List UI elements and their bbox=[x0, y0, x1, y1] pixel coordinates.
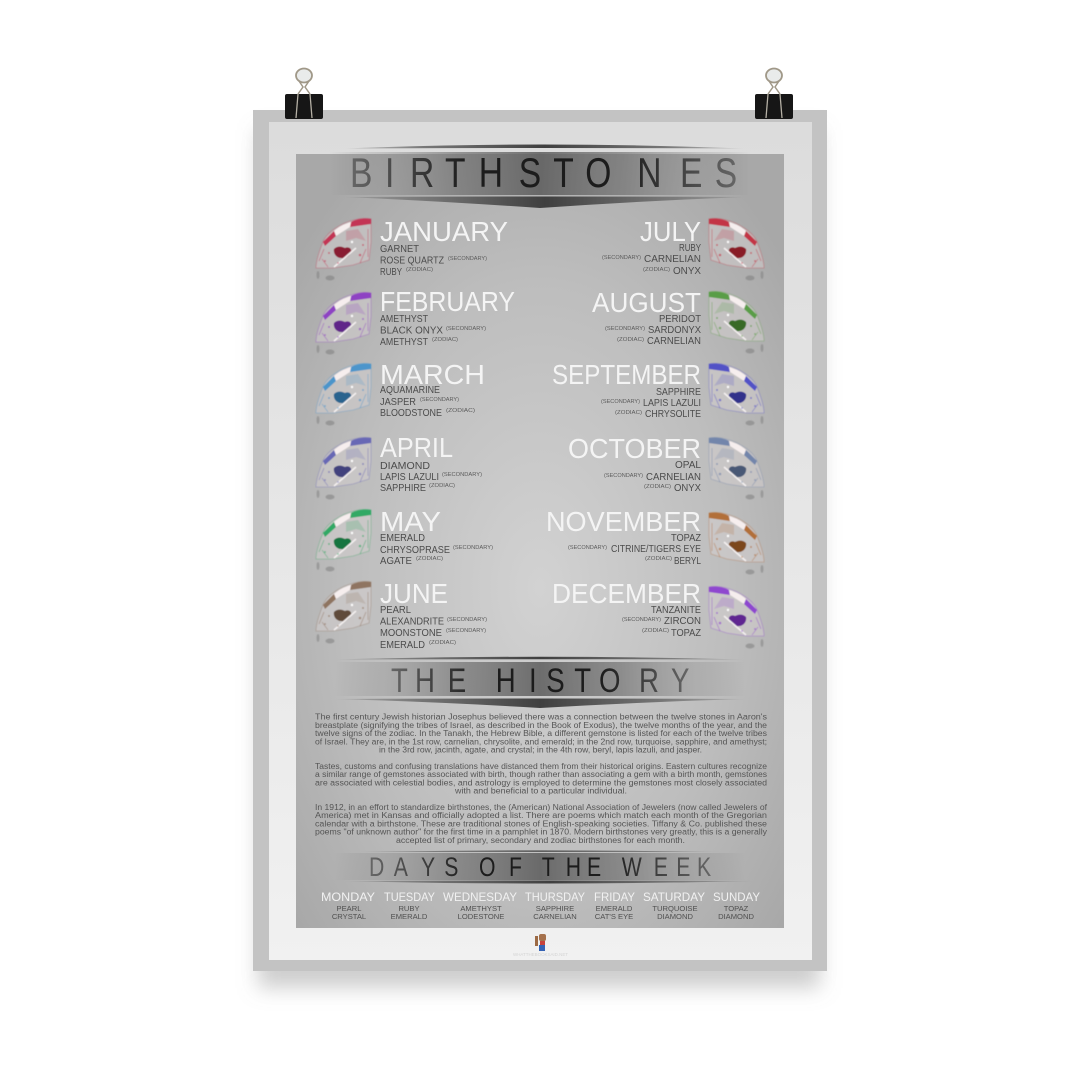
stones list: SARDONYX bbox=[648, 324, 701, 336]
stones list: (SECONDARY) bbox=[601, 399, 640, 405]
Tuesday: TUESDAY bbox=[384, 890, 435, 904]
title bbox=[330, 144, 750, 208]
stones list: (ZODIAC) bbox=[416, 556, 443, 562]
stones list: (SECONDARY) bbox=[446, 628, 486, 634]
stones list bbox=[601, 386, 701, 420]
stones list: CHRYSOPRASE bbox=[380, 544, 450, 556]
Friday: CAT'S EYE bbox=[595, 912, 633, 921]
Sunday bbox=[713, 890, 760, 921]
Monday: PEARL bbox=[337, 904, 361, 913]
icon: aquamarine gem bbox=[316, 363, 371, 426]
month heading: OCTOBER bbox=[568, 433, 701, 464]
stones list: (ZODIAC) bbox=[406, 267, 433, 273]
month heading: JANUARY bbox=[380, 216, 508, 247]
stones list: BLACK ONYX bbox=[380, 324, 443, 336]
month heading: FEBRUARY bbox=[380, 286, 515, 317]
stones list bbox=[622, 604, 702, 639]
paragraph 3: In 1912, in an effort to standardize birthstones, the (American) National Association of Jewelers (now called Jewelers of bbox=[315, 803, 768, 812]
history text bbox=[315, 712, 768, 845]
paragraph 2: are associated with celestial bodies, and astrology is employed to determine the gemstones most closely associated bbox=[315, 778, 767, 787]
stones list: CARNELIAN bbox=[646, 471, 701, 483]
November bbox=[546, 506, 764, 574]
stones list bbox=[380, 604, 487, 651]
stones list: (SECONDARY) bbox=[448, 256, 487, 262]
stones list: ONYX bbox=[674, 482, 701, 494]
icon: sapphire gem bbox=[709, 363, 764, 426]
August bbox=[592, 287, 764, 354]
stones list: PERIDOT bbox=[659, 313, 702, 325]
paragraph 1: of Israel. They are, in the 1st row, carnelian, chrysolite, and emerald; in the 2nd row, turquoise, sapphire, and amethyst; bbox=[315, 737, 767, 746]
days table bbox=[321, 890, 760, 921]
paragraph 3: America) met in Kansas and officially adopted a list. There are poems which match each month of the Gregorian bbox=[315, 811, 767, 820]
stones list: (ZODIAC) bbox=[643, 267, 670, 273]
stones list: (ZODIAC) bbox=[446, 408, 475, 414]
Thursday: SAPPHIRE bbox=[536, 904, 574, 913]
Monday bbox=[321, 890, 375, 921]
paragraph 3: poems "of unknown author" for the first time in a pamphlet in 1870. Modern birthstones very greatly, this is a generally bbox=[315, 828, 767, 837]
stones list: EMERALD bbox=[380, 532, 425, 544]
logo mascot: WHATTHEBOOKSAID.NET bbox=[513, 952, 568, 957]
paragraph 1 bbox=[315, 712, 768, 755]
stones list: (SECONDARY) bbox=[604, 473, 643, 479]
stones list: (SECONDARY) bbox=[453, 545, 493, 551]
stones list bbox=[380, 532, 493, 567]
month heading: JUNE bbox=[380, 578, 448, 609]
stones list: GARNET bbox=[380, 243, 420, 255]
paragraph 2: a similar range of gemstones associated with birth, though rather than associating a gem with a birth month, gemstones bbox=[315, 770, 767, 779]
paragraph 2: Tastes, customs and confusing translations have distanced them from their historical origins. Eastern cultures recognize bbox=[315, 762, 768, 771]
stones list: OPAL bbox=[675, 459, 701, 471]
icon: opal gem bbox=[709, 437, 764, 500]
paragraph 1: The first century Jewish historian Josephus believed there was a connection between the twelve stones in Aaron's bbox=[315, 712, 767, 722]
stones list: BERYL bbox=[674, 555, 701, 567]
logo mascot bbox=[513, 934, 568, 957]
stones list bbox=[605, 313, 702, 347]
Wednesday: LODESTONE bbox=[458, 912, 504, 921]
stones list: (SECONDARY) bbox=[420, 397, 459, 403]
paragraph 3: accepted list of primary, secondary and zodiac birthstones for each month. bbox=[396, 836, 685, 845]
stones list: AMETHYST bbox=[380, 313, 428, 325]
stones list bbox=[380, 384, 475, 419]
stones list: JASPER bbox=[380, 396, 416, 408]
March bbox=[316, 359, 485, 426]
paragraph 2 bbox=[315, 762, 768, 796]
paragraph 3 bbox=[315, 803, 768, 845]
stones list bbox=[604, 459, 701, 494]
October bbox=[568, 433, 764, 500]
stones list: TOPAZ bbox=[671, 627, 702, 639]
icon: diamond gem bbox=[316, 437, 371, 500]
stones list: ZIRCON bbox=[664, 615, 701, 627]
stones list: (SECONDARY) bbox=[447, 617, 487, 623]
paragraph 1: twelve signs of the zodiac. In the Tanakh, the Hebrew Bible, a different gemstone is listed for each of the twelve tribes bbox=[315, 729, 767, 738]
stones list: BLOODSTONE bbox=[380, 407, 442, 419]
Sunday: SUNDAY bbox=[713, 890, 760, 904]
stones list: SAPPHIRE bbox=[656, 386, 701, 398]
grey content panel bbox=[296, 154, 784, 928]
icon: peridot gem bbox=[709, 291, 764, 354]
May bbox=[316, 506, 493, 572]
stones list: (SECONDARY) bbox=[568, 545, 607, 551]
month heading: MAY bbox=[380, 506, 441, 537]
stones list: CHRYSOLITE bbox=[645, 408, 701, 420]
stones list: ROSE QUARTZ bbox=[380, 254, 444, 266]
stones list: (SECONDARY) bbox=[446, 326, 486, 332]
stones list: ALEXANDRITE bbox=[380, 616, 444, 628]
Saturday: TURQUOISE bbox=[652, 904, 698, 913]
Sunday: DIAMOND bbox=[718, 912, 754, 921]
binder clip: right bbox=[755, 68, 793, 119]
stones list: AGATE bbox=[380, 555, 412, 567]
Monday: CRYSTAL bbox=[332, 912, 366, 921]
paragraph 1: breastplate (signifying the tribes of Israel, as described in the Book of Exodus), the twelve months of the year, and the bbox=[315, 721, 768, 730]
stones list: AMETHYST bbox=[380, 336, 428, 348]
poster shadow bbox=[258, 130, 820, 988]
stones list: (ZODIAC) bbox=[432, 337, 458, 343]
September bbox=[552, 359, 764, 426]
Friday: EMERALD bbox=[596, 904, 633, 913]
icon: emerald gem bbox=[316, 509, 371, 572]
stones list: (SECONDARY) bbox=[602, 255, 641, 261]
heading: days of the week: DAYS OF THE WEEK bbox=[369, 853, 711, 883]
stones list: TANZANITE bbox=[651, 604, 701, 616]
Tuesday: EMERALD bbox=[391, 912, 428, 921]
stones list bbox=[380, 313, 486, 348]
month heading: DECEMBER bbox=[552, 578, 701, 609]
December bbox=[552, 578, 764, 648]
Saturday bbox=[643, 890, 705, 921]
icon: garnet gem bbox=[316, 218, 371, 280]
Tuesday bbox=[384, 890, 435, 921]
stones list: DIAMOND bbox=[380, 460, 430, 472]
stones list: (ZODIAC) bbox=[429, 640, 456, 646]
stones list: EMERALD bbox=[380, 639, 425, 651]
Wednesday: WEDNESDAY bbox=[443, 890, 517, 904]
stones list: MOONSTONE bbox=[380, 627, 442, 639]
stones list: ONYX bbox=[673, 265, 701, 277]
Saturday: SATURDAY bbox=[643, 890, 705, 904]
stones list bbox=[602, 242, 701, 277]
July bbox=[602, 216, 764, 280]
icon: tanzanite gem bbox=[709, 586, 764, 648]
Tuesday: RUBY bbox=[398, 904, 420, 913]
January bbox=[316, 216, 508, 280]
Wednesday bbox=[443, 890, 517, 921]
Thursday bbox=[525, 890, 585, 921]
stones list: LAPIS LAZULI bbox=[380, 471, 439, 483]
stones list: (ZODIAC) bbox=[617, 337, 644, 343]
month heading: JULY bbox=[640, 216, 701, 247]
paragraph 2: with and beneficial to a particular individual. bbox=[454, 787, 627, 796]
icon: topaz gem bbox=[709, 512, 764, 574]
stones list: (SECONDARY) bbox=[622, 617, 661, 623]
poster sheet bbox=[253, 110, 827, 971]
Wednesday: AMETHYST bbox=[460, 904, 502, 913]
stones list bbox=[568, 532, 702, 567]
April bbox=[316, 432, 482, 500]
heading: the history bbox=[335, 657, 745, 708]
stones list: AQUAMARINE bbox=[380, 384, 440, 396]
stones list: (ZODIAC) bbox=[645, 556, 672, 562]
month heading: MARCH bbox=[380, 359, 485, 390]
stones list: (ZODIAC) bbox=[615, 410, 642, 416]
stones list: SAPPHIRE bbox=[380, 482, 426, 494]
Saturday: DIAMOND bbox=[657, 912, 693, 921]
stones list: LAPIS LAZULI bbox=[643, 397, 701, 409]
stones list: (ZODIAC) bbox=[429, 483, 455, 489]
stones list bbox=[380, 243, 487, 278]
stones list: RUBY bbox=[679, 242, 701, 254]
stones list: (ZODIAC) bbox=[644, 484, 671, 490]
icon: ruby gem bbox=[709, 218, 764, 280]
month heading: AUGUST bbox=[592, 287, 701, 318]
stones list: RUBY bbox=[380, 266, 402, 278]
stones list: CARNELIAN bbox=[647, 335, 701, 347]
Friday: FRIDAY bbox=[594, 890, 635, 904]
Friday bbox=[594, 890, 635, 921]
icon: amethyst gem bbox=[316, 292, 371, 354]
February bbox=[316, 286, 515, 354]
icon: pearl gem bbox=[316, 581, 371, 644]
month heading: SEPTEMBER bbox=[552, 359, 701, 390]
Thursday: CARNELIAN bbox=[533, 912, 577, 921]
month heading: NOVEMBER bbox=[546, 506, 701, 537]
stones list: TOPAZ bbox=[671, 532, 702, 544]
title: BIRTHSTONES bbox=[350, 151, 737, 197]
paragraph 1: in the 3rd row, jacinth, agate, and crystal; in the 4th row, beryl, lapis lazuli, and jasper. bbox=[379, 746, 702, 755]
heading: the history: THE HISTORY bbox=[391, 661, 690, 700]
June bbox=[316, 578, 487, 651]
Thursday: THURSDAY bbox=[525, 890, 585, 904]
Sunday: TOPAZ bbox=[724, 904, 749, 913]
stones list: PEARL bbox=[380, 604, 411, 616]
stones list: (SECONDARY) bbox=[605, 326, 645, 332]
stones list: CARNELIAN bbox=[644, 253, 701, 265]
paragraph 3: calendar with a birthstone. These are traditional stones of English-speaking societies. Tiffany & Co. published these bbox=[315, 819, 768, 828]
stones list: (SECONDARY) bbox=[442, 472, 482, 478]
stones list: (ZODIAC) bbox=[642, 628, 669, 634]
Monday: MONDAY bbox=[321, 890, 375, 904]
stones list: CITRINE/TIGERS EYE bbox=[611, 543, 701, 555]
stones list bbox=[380, 460, 482, 494]
binder clip: left bbox=[285, 68, 323, 119]
month heading: APRIL bbox=[380, 432, 453, 463]
